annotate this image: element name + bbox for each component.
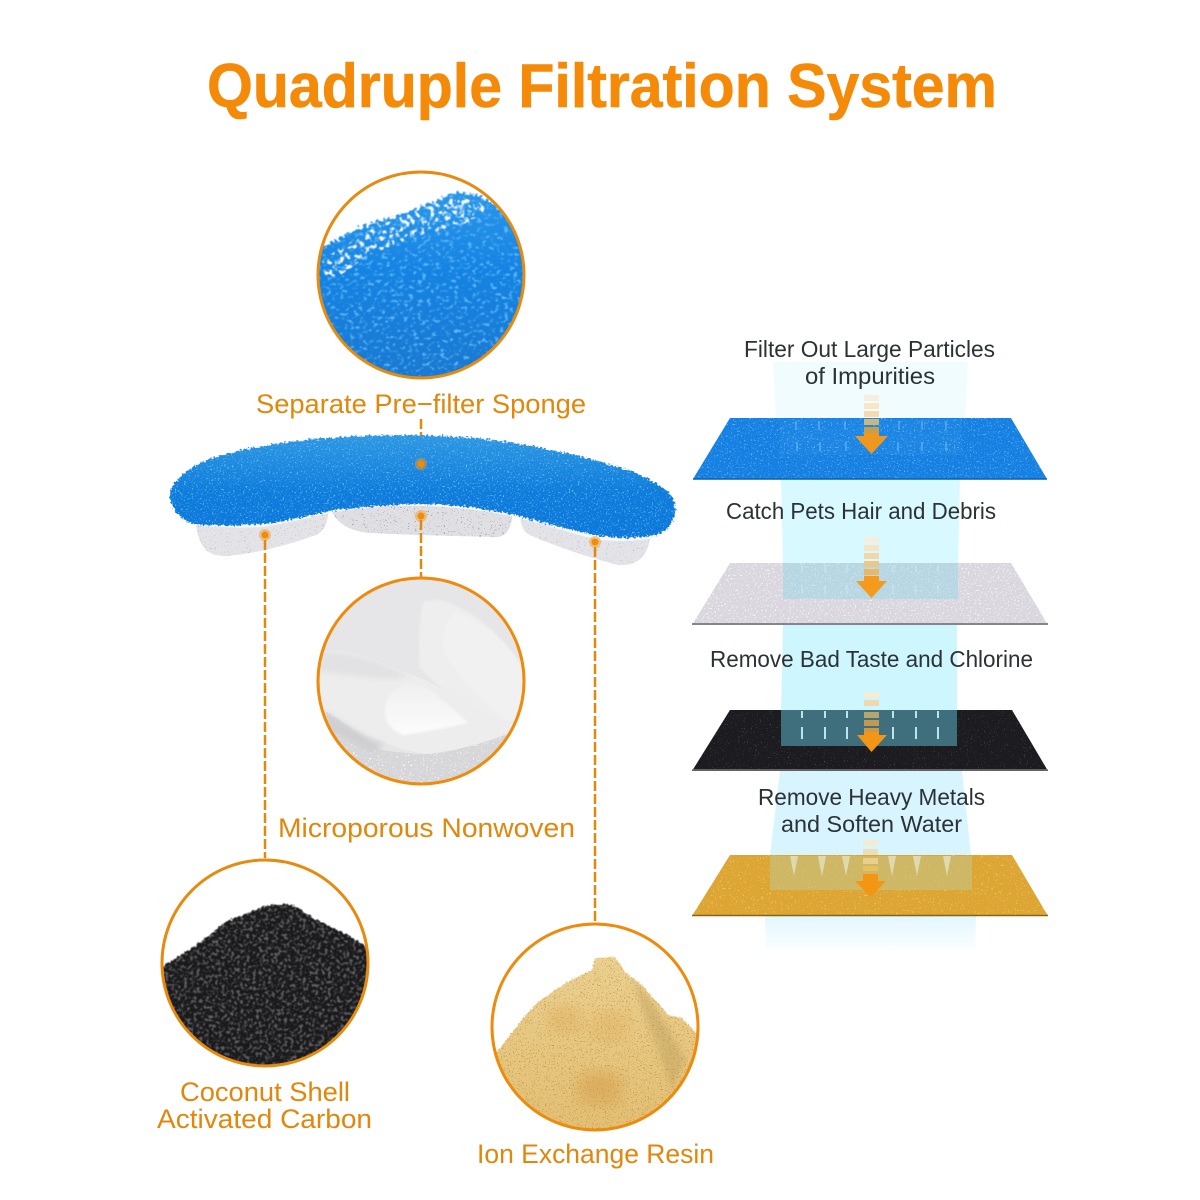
filter layer: black carbon bbox=[692, 710, 1048, 771]
callout dot: nonwoven bbox=[415, 510, 427, 522]
water beam bbox=[765, 362, 976, 950]
filter cartridge bbox=[170, 435, 675, 565]
sponge pad bbox=[170, 435, 675, 538]
right tray bbox=[520, 505, 652, 565]
arrow: step 2 bbox=[856, 537, 887, 598]
callout dot: carbon bbox=[259, 529, 271, 541]
callout line: carbon bbox=[264, 540, 266, 858]
filter layer: amber resin bbox=[692, 855, 1048, 916]
label: carbon: Activated Carbon bbox=[157, 1104, 372, 1134]
arrow: step 4 bbox=[855, 840, 886, 897]
arrow: step 3 bbox=[857, 692, 887, 752]
middle tray bbox=[327, 500, 513, 537]
panel: filter cartridge and materials bbox=[157, 172, 714, 1169]
callout dot: sponge bbox=[415, 458, 427, 470]
label: nonwoven: Microporous Nonwoven bbox=[278, 813, 575, 843]
icon: carbon material circle bbox=[160, 860, 372, 1070]
callout dot: resin bbox=[589, 536, 601, 548]
callout line: nonwoven bbox=[420, 520, 422, 578]
text: step 4 bbox=[758, 784, 985, 837]
filter layer: blue sponge bbox=[693, 418, 1047, 479]
left tray bbox=[195, 505, 329, 556]
title: Quadruple Filtration System bbox=[207, 52, 997, 121]
filter layer: grey nonwoven bbox=[692, 563, 1048, 625]
text: step 1: Filter Out Large Particles bbox=[744, 336, 995, 362]
text: step 3: Remove Bad Taste and Chlorine bbox=[710, 646, 1033, 672]
text: step 1: of Impurities bbox=[805, 363, 935, 389]
icon: resin material circle bbox=[490, 924, 700, 1135]
icon: nonwoven material circle bbox=[316, 576, 526, 786]
label: sponge: Separate Pre−filter Sponge bbox=[256, 389, 586, 419]
arrow: step 1 bbox=[855, 395, 888, 454]
text: step 4: and Soften Water bbox=[781, 811, 962, 837]
text: step 1 bbox=[744, 336, 995, 389]
callout line: sponge bbox=[420, 419, 422, 464]
text: step 4: Remove Heavy Metals bbox=[758, 784, 985, 810]
label: resin: Ion Exchange Resin bbox=[477, 1139, 714, 1169]
icon: sponge material circle bbox=[312, 172, 535, 385]
label: carbon: Coconut Shell bbox=[180, 1077, 350, 1107]
panel: filtration layers bbox=[692, 336, 1048, 950]
pad underside lip bbox=[180, 498, 665, 541]
text: step 2: Catch Pets Hair and Debris bbox=[726, 498, 996, 524]
callout line: resin bbox=[594, 547, 596, 923]
label: carbon bbox=[157, 1077, 372, 1134]
